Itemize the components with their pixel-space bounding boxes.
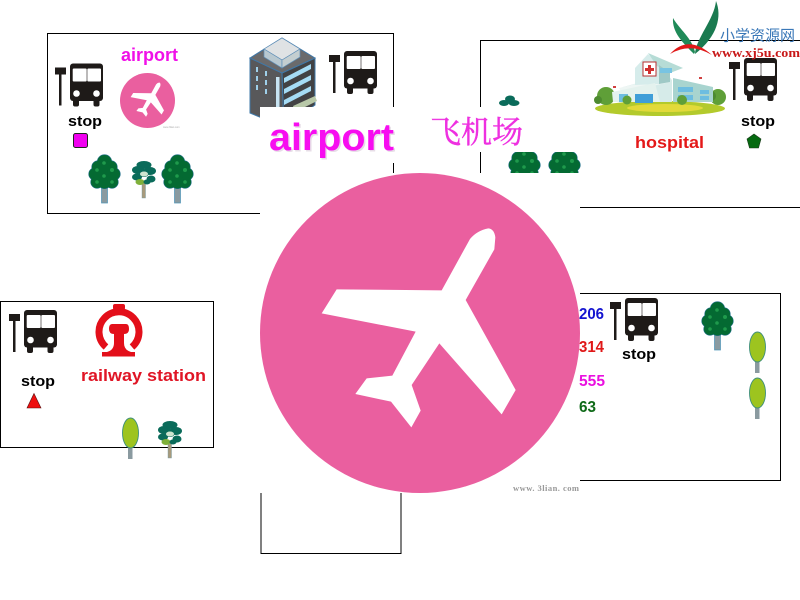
logo: xj5u: www.xj5u.com [712, 45, 800, 60]
route numbers: 314 [579, 339, 604, 356]
marker: magenta square [74, 134, 88, 148]
title: airport: airport [270, 118, 396, 160]
icon: hospital [594, 53, 726, 116]
panel: empty bottom box [261, 440, 401, 554]
panel: airport map [48, 34, 394, 214]
marker: red triangle [27, 394, 41, 408]
route numbers: 206 [579, 306, 604, 323]
logo: xj5u: 小学资源网 [720, 28, 795, 44]
icon: bus stop [610, 298, 658, 341]
label: railway station: railway station [81, 367, 206, 385]
icon: office building [250, 38, 317, 127]
label: stop: stop [622, 346, 656, 363]
icon: small airport badge [120, 73, 180, 129]
icon: bus stop right [329, 51, 377, 94]
icon: bus stop [729, 58, 777, 101]
label: stop: stop [21, 373, 55, 390]
watermark: 3lian: www. 3lian. com [513, 483, 579, 493]
panel: railway station map [0, 302, 214, 459]
icon: bus stop left [55, 64, 103, 106]
label: stop: stop [68, 113, 102, 130]
route numbers [579, 306, 605, 416]
title: chinese: 飞机场 [430, 107, 523, 152]
route numbers: 555 [579, 373, 605, 390]
icon: bus stop [9, 310, 57, 353]
icon: small airport badge: www.3lian.com [163, 126, 180, 129]
tree row [88, 154, 194, 203]
main airport icon [260, 173, 580, 493]
marker: green pentagon [747, 134, 761, 148]
label: airport: airport [121, 45, 178, 65]
logo: xj5u [670, 1, 800, 60]
label: hospital: hospital [635, 134, 704, 152]
title: airport: airport [269, 117, 394, 159]
trees [122, 418, 182, 459]
panel: hospital map [480, 40, 800, 208]
icon: top tree [499, 96, 520, 106]
icon: cut off bushes [508, 145, 581, 194]
label: stop: stop [741, 113, 775, 130]
mask: title backing [260, 107, 580, 493]
panel: routes map [560, 294, 780, 480]
route numbers: 63 [579, 399, 596, 416]
icon: railway logo [99, 304, 139, 356]
trees [701, 301, 766, 419]
